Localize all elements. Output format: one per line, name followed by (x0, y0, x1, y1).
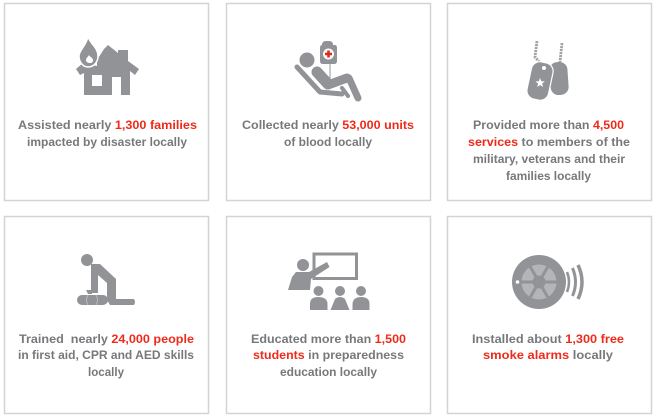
text: training line 2: in first aid, CPR and AED skills (18, 348, 194, 362)
panel: first aid training (4, 216, 208, 414)
text: blood units collected: Collected nearly 53,000 units (242, 118, 414, 132)
text: education line 1: Educated more than 1,500 (251, 332, 406, 346)
icon: teacher and students (288, 254, 370, 310)
text: families assisted: Assisted nearly 1,300 families (18, 118, 197, 132)
text: services line 3: military, veterans and their (473, 152, 625, 166)
text: services line 2: services to members of the (468, 135, 630, 149)
panel: smoke alarms (448, 216, 652, 414)
text: alarms line 1: Installed about 1,300 free (472, 332, 624, 346)
text: services line 4: families locally (506, 169, 591, 183)
text: training line 3: locally (88, 365, 124, 379)
panel: preparedness education (226, 216, 430, 414)
icon: blood donor with bag (297, 41, 358, 98)
icon: smoke alarm (512, 255, 582, 309)
panel: families assisted (4, 4, 208, 200)
text: services line 1: Provided more than 4,500 (473, 118, 624, 132)
icon: CPR (77, 254, 135, 305)
text: impacted by disaster: impacted by disaster locally (27, 135, 187, 149)
icon: dog tags (525, 41, 569, 102)
text: of blood locally: of blood locally (284, 135, 372, 149)
panel: military services (448, 4, 652, 200)
icon: burning house (76, 36, 139, 95)
text: alarms line 2: smoke alarms locally (483, 348, 613, 362)
text: education line 3: education locally (280, 365, 377, 379)
text: education line 2: students in preparedness (253, 348, 404, 362)
panel: blood collected (226, 4, 430, 200)
text: training line 1: Trained nearly 24,000 people (19, 332, 194, 346)
